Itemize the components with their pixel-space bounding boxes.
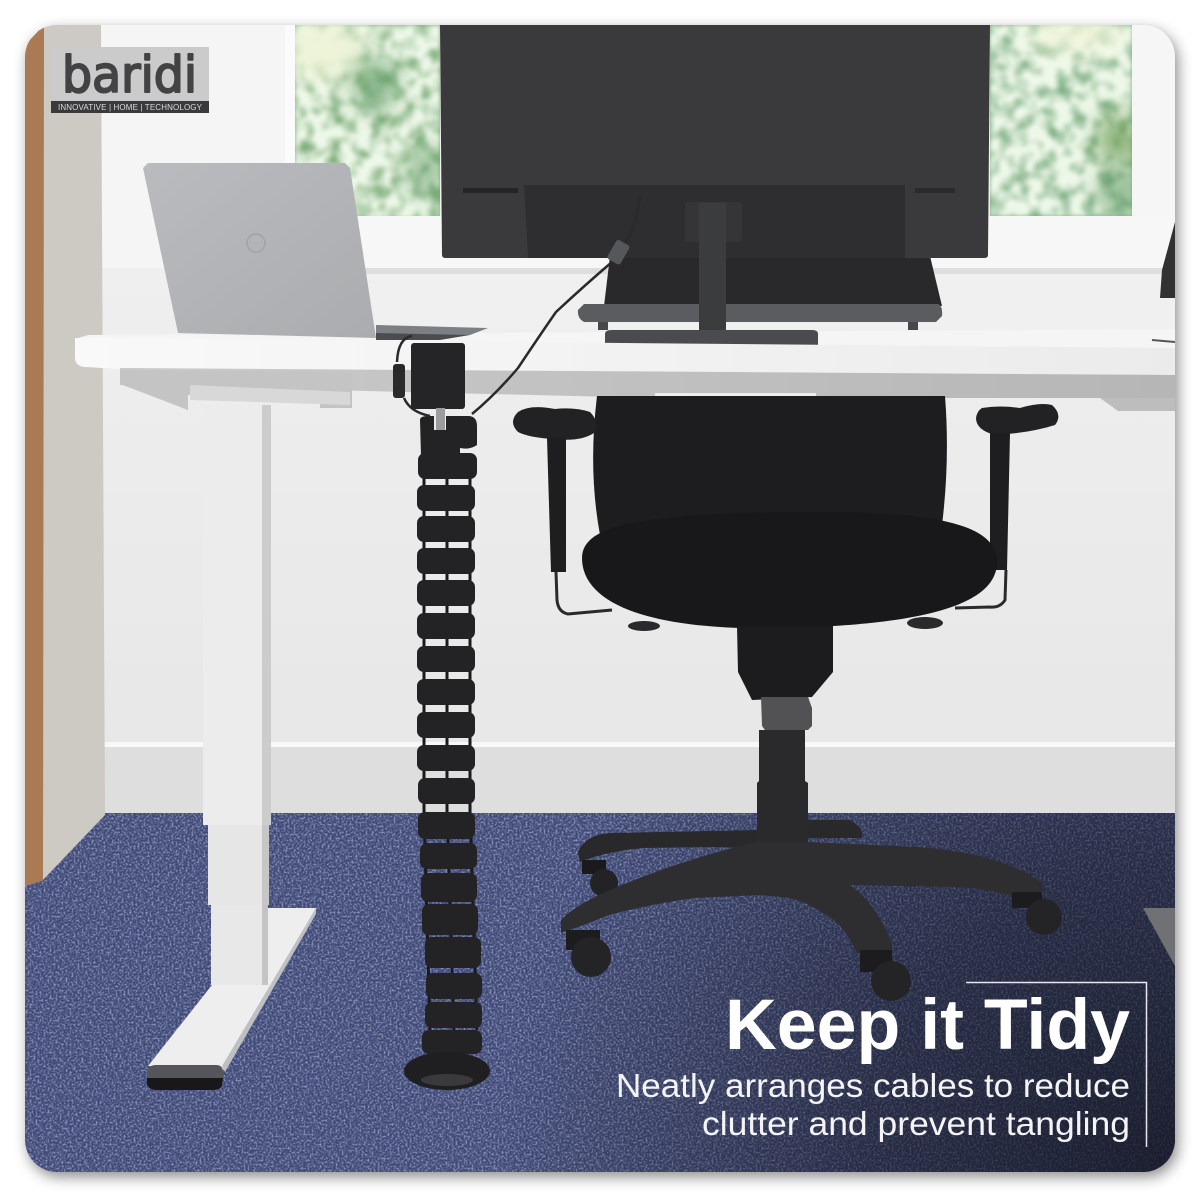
chair: rear caster — [582, 860, 618, 897]
chair headrest behind monitor — [604, 256, 942, 306]
chair: left armrest — [513, 407, 612, 614]
cable spine: mount box — [411, 343, 465, 436]
window: right pane with trees — [990, 19, 1142, 217]
monitor — [440, 25, 990, 258]
baseboard — [101, 742, 1175, 817]
chair: seat cushion — [582, 512, 997, 628]
door frame: grey panel — [42, 25, 105, 884]
chair: mechanism — [737, 626, 833, 700]
white desk leg — [147, 405, 316, 1090]
chair: caster front — [860, 950, 911, 1001]
carpet floor — [25, 813, 1175, 1172]
logo wordmark: baridi — [62, 46, 197, 104]
chair: seat feet — [628, 617, 943, 631]
laptop — [143, 163, 488, 340]
office chair — [513, 396, 1062, 1001]
caption bracket — [966, 982, 1146, 1147]
desk top surface — [78, 334, 103, 338]
cables — [393, 240, 630, 416]
window frame and sill — [285, 28, 1162, 274]
keyboard — [578, 304, 942, 330]
chair: adjust collar — [761, 697, 812, 730]
second monitor at right edge — [1160, 222, 1175, 298]
chair: caster left — [566, 930, 611, 977]
desk front edge — [75, 338, 1175, 369]
chair: right armrest — [955, 404, 1058, 608]
door: wood edge — [25, 25, 44, 886]
far desk foot at right edge — [1143, 908, 1175, 966]
caption body text: Neatly arranges cables to reduce — [616, 1067, 1130, 1104]
cable spine: floor base — [404, 1052, 490, 1090]
chair: back base legs — [578, 820, 862, 862]
caption heading: Keep it Tidy — [725, 986, 1131, 1065]
logo — [51, 46, 209, 113]
desk underside frame — [120, 340, 1175, 411]
monitor stand — [605, 242, 818, 345]
caption body text — [616, 1067, 1130, 1142]
chair: front base legs — [561, 842, 1042, 955]
window: left pane with trees — [295, 25, 440, 216]
chair: gas cylinder — [757, 730, 808, 845]
chair: caster right — [1012, 892, 1062, 935]
chair: backrest — [593, 396, 947, 535]
cable spine — [417, 416, 482, 1054]
logo tagline: INNOVATIVE | HOME | TECHNOLOGY — [58, 103, 203, 112]
background: room wall — [32, 37, 1175, 742]
caption body text: clutter and prevent tangling — [702, 1105, 1130, 1142]
